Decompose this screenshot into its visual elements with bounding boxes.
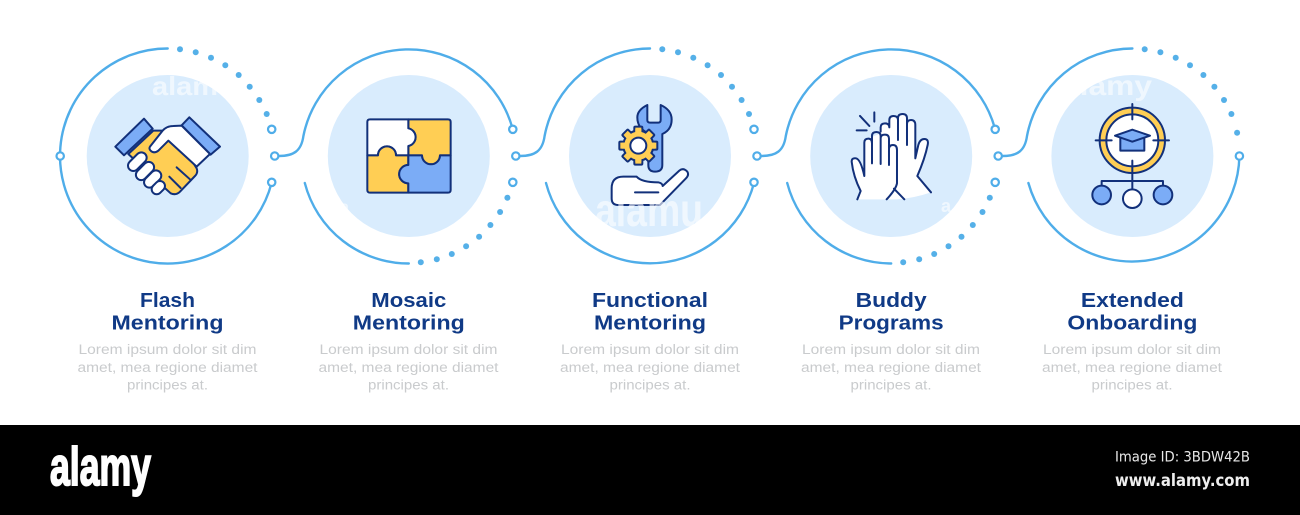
icon: high five [852, 112, 931, 199]
heading: buddy programs: Buddy [856, 290, 928, 312]
description 2: principes at. [368, 378, 449, 392]
heading: extended onboarding: Extended [1081, 290, 1184, 312]
watermark fragments: alamy [1062, 70, 1152, 101]
description 2 [318, 342, 499, 392]
panel: flash mentoring [56, 46, 278, 393]
logo: alamy: alamy [50, 437, 151, 497]
footer band [0, 425, 1300, 515]
heading: functional mentoring: Mentoring [594, 312, 706, 334]
heading: functional mentoring: Functional [592, 290, 708, 312]
description 3: amet, mea regione diamet [560, 360, 740, 375]
description 5: amet, mea regione diamet [1042, 360, 1222, 375]
watermark fragments: a [941, 196, 952, 216]
description 4: principes at. [850, 378, 932, 392]
description 3: principes at. [610, 378, 690, 392]
description 5: principes at. [1092, 378, 1172, 392]
ring and dots 4 [761, 49, 1002, 265]
icon: puzzle [367, 119, 451, 193]
watermark fragments: a [340, 199, 349, 216]
heading: mosaic mentoring: Mentoring [353, 312, 465, 334]
icon: handshake [115, 117, 220, 196]
ring and dots 2 [279, 49, 520, 265]
heading: mosaic mentoring [353, 290, 465, 334]
description 4: Lorem ipsum dolor sit dim [802, 342, 980, 357]
ring and dots 3 [520, 46, 761, 263]
image id: Image ID: 3BDW42B [1115, 450, 1250, 466]
heading: mosaic mentoring: Mosaic [371, 290, 446, 312]
description 5: Lorem ipsum dolor sit dim [1043, 342, 1221, 357]
heading: flash mentoring: Mentoring [112, 312, 224, 334]
ring and dots 5 [1002, 46, 1243, 262]
heading: extended onboarding: Onboarding [1067, 312, 1197, 334]
watermark fragments: alamu [595, 184, 703, 236]
website: www.alamy.com [1115, 471, 1250, 490]
heading: extended onboarding [1067, 290, 1197, 334]
description 3: Lorem ipsum dolor sit dim [561, 342, 739, 357]
description 2: amet, mea regione diamet [318, 360, 499, 375]
description 5 [1042, 342, 1222, 392]
panel: functional mentoring [520, 46, 761, 393]
description 1: amet, mea regione diamet [78, 360, 258, 375]
icon: target with graduation cap and hierarchy [1092, 104, 1172, 208]
heading: buddy programs [839, 290, 944, 334]
panel: mosaic mentoring [279, 49, 520, 393]
description 3 [560, 342, 740, 392]
panel: extended onboarding [1002, 46, 1243, 393]
description 1: principes at. [127, 378, 208, 392]
icon: wrench gear and hand [612, 105, 688, 205]
panel: buddy programs [761, 49, 1002, 393]
heading: flash mentoring: Flash [140, 290, 195, 312]
description 2: Lorem ipsum dolor sit dim [320, 342, 498, 357]
description 1: Lorem ipsum dolor sit dim [78, 342, 256, 357]
heading: buddy programs: Programs [839, 312, 944, 334]
ring and dots 1 [56, 46, 278, 263]
heading: functional mentoring [592, 290, 708, 334]
description 4: amet, mea regione diamet [801, 360, 981, 375]
description 4 [801, 342, 981, 392]
watermark fragments: alam [152, 71, 218, 101]
description 1 [78, 342, 258, 392]
heading: flash mentoring [112, 290, 224, 334]
watermark fragments [152, 70, 1152, 236]
